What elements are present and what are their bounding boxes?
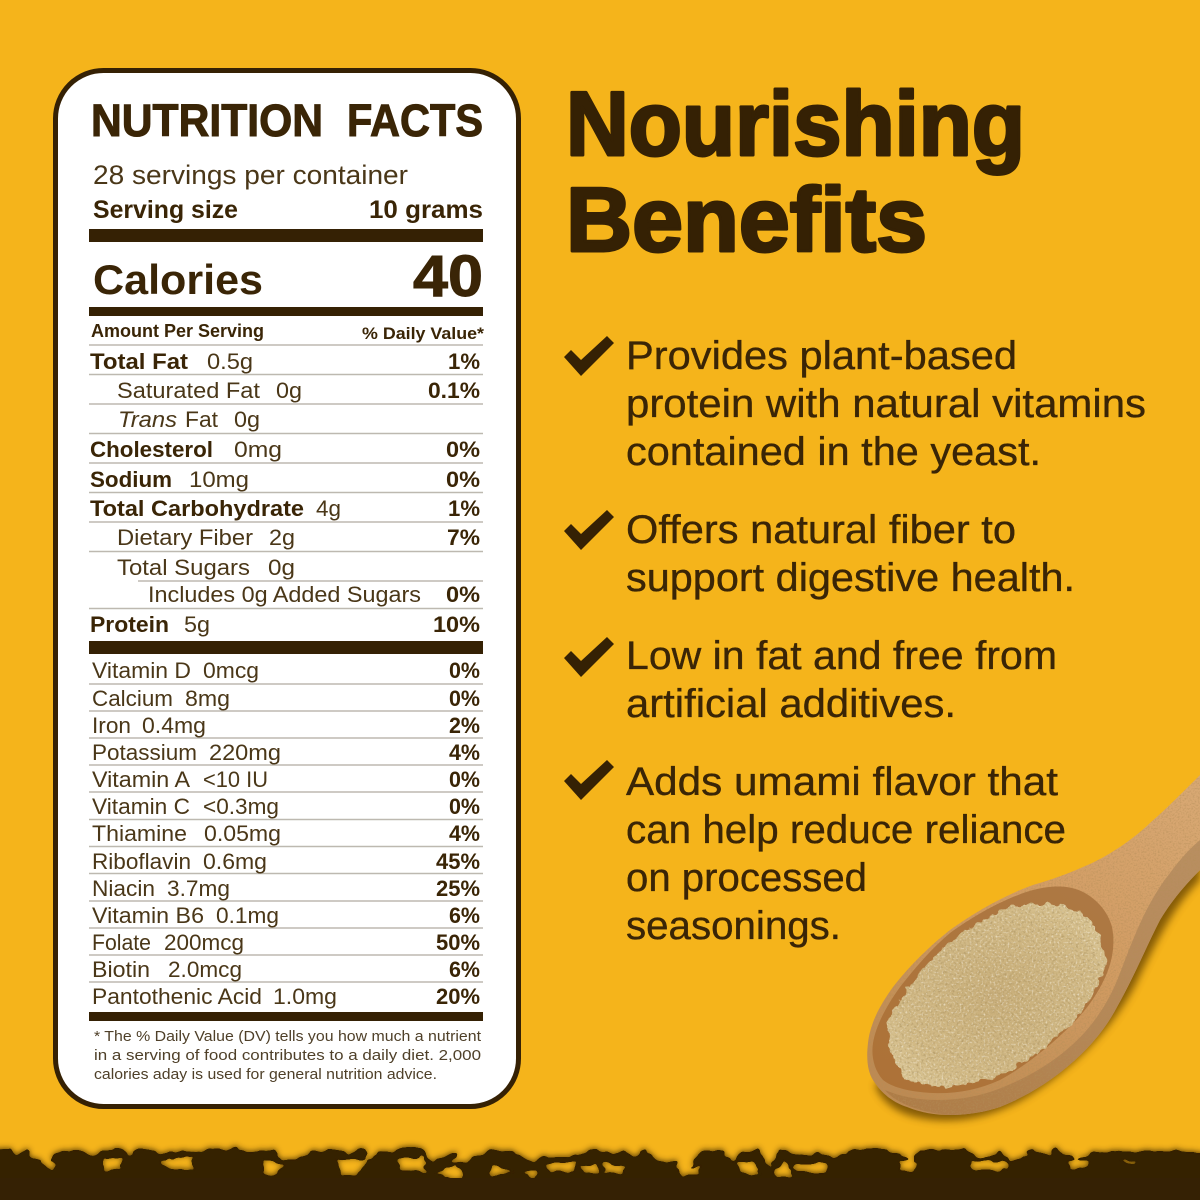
footnote bbox=[94, 1028, 482, 1083]
benefit text: Low in fat and free from bbox=[626, 634, 1057, 678]
row: total sugars: Total Sugars bbox=[117, 555, 250, 580]
row: saturated fat: 0.1% bbox=[428, 378, 480, 403]
row: niacin: 25% bbox=[436, 876, 480, 901]
ground: dark crumbled soil strip bbox=[0, 1147, 1200, 1200]
row: sodium bbox=[90, 467, 480, 492]
benefit: natural fiber bbox=[564, 508, 1075, 600]
row: iron: 2% bbox=[449, 713, 480, 738]
heading: nutrition facts: NUTRITION bbox=[91, 95, 323, 146]
row: saturated fat: 0g bbox=[276, 378, 302, 403]
row: total fat: 0.5g bbox=[207, 349, 253, 374]
heading: nutrition facts bbox=[91, 95, 483, 146]
row: total fat bbox=[90, 349, 480, 374]
footnote: in a serving of food contributes to a daily diet. 2,000 bbox=[94, 1047, 481, 1064]
row: pantothenic acid: Pantothenic Acid bbox=[92, 984, 262, 1009]
column headings: % Daily Value* bbox=[362, 324, 484, 343]
yeast powder bbox=[888, 904, 1105, 1087]
benefit text: Adds umami flavor that bbox=[626, 760, 1058, 804]
benefit: low in fat bbox=[564, 634, 1057, 726]
benefit text: can help reduce reliance bbox=[626, 808, 1066, 852]
row: cholesterol: 0% bbox=[446, 437, 480, 462]
row: riboflavin: 45% bbox=[436, 849, 480, 874]
row: added sugars: 0% bbox=[446, 582, 480, 607]
row: vitamin a: <10 IU bbox=[203, 767, 268, 792]
row: dietary fiber: 2g bbox=[269, 525, 295, 550]
row: total sugars bbox=[117, 555, 295, 580]
row: protein bbox=[90, 612, 480, 637]
row: cholesterol: 0mg bbox=[234, 437, 282, 462]
icon: check mark bbox=[564, 336, 614, 376]
nutrient rows bbox=[90, 349, 480, 637]
title: Benefits bbox=[566, 170, 927, 271]
row: total carbohydrate: 4g bbox=[316, 496, 341, 521]
row: trans fat bbox=[118, 407, 260, 432]
row: folate: 50% bbox=[436, 930, 480, 955]
row: vitamin a: Vitamin A bbox=[92, 767, 190, 792]
row: potassium: Potassium bbox=[92, 740, 197, 765]
row: thiamine: 0.05mg bbox=[204, 821, 281, 846]
row: trans fat: Trans bbox=[118, 407, 177, 432]
row: folate bbox=[92, 930, 480, 955]
row: biotin bbox=[92, 957, 480, 982]
benefit text: Offers natural fiber to bbox=[626, 508, 1016, 552]
row: thiamine: 4% bbox=[449, 821, 480, 846]
footnote: calories aday is used for general nutrition advice. bbox=[94, 1066, 437, 1083]
row: folate: Folate bbox=[92, 930, 151, 955]
spoon underside bbox=[885, 840, 1200, 1115]
row: riboflavin: 0.6mg bbox=[203, 849, 267, 874]
row: pantothenic acid: 20% bbox=[436, 984, 480, 1009]
row: calcium: Calcium bbox=[92, 686, 173, 711]
row: dietary fiber bbox=[117, 525, 480, 550]
row: niacin: 3.7mg bbox=[167, 876, 230, 901]
title: Nourishing bbox=[566, 74, 1025, 175]
vitamin and mineral rows bbox=[92, 658, 480, 1009]
row: vitamin c: Vitamin C bbox=[92, 794, 190, 819]
row: vitamin c bbox=[92, 794, 480, 819]
panel outline bbox=[56, 70, 518, 1106]
benefit text bbox=[626, 760, 1066, 948]
row: iron bbox=[92, 713, 480, 738]
benefit text: on processed bbox=[626, 856, 867, 900]
row: thiamine: Thiamine bbox=[92, 821, 187, 846]
row: sodium: Sodium bbox=[90, 467, 172, 492]
row: vitamin d: 0% bbox=[449, 658, 480, 683]
row: total carbohydrate bbox=[90, 496, 480, 521]
benefit text: protein with natural vitamins bbox=[626, 382, 1146, 426]
spoon body bbox=[867, 775, 1200, 1115]
row: cholesterol: Cholesterol bbox=[90, 437, 213, 462]
row: protein: 5g bbox=[184, 612, 210, 637]
row: protein: 10% bbox=[433, 612, 480, 637]
benefit: umami flavor bbox=[564, 760, 1066, 948]
row: vitamin a: 0% bbox=[449, 767, 480, 792]
row: total fat: Total Fat bbox=[90, 349, 189, 374]
benefit text: Provides plant-based bbox=[626, 334, 1017, 378]
servings per container: 28 servings per container bbox=[93, 160, 408, 190]
serving size: 10 grams bbox=[369, 196, 483, 224]
row: saturated fat: Saturated Fat bbox=[117, 378, 260, 403]
benefit text: seasonings. bbox=[626, 904, 841, 948]
icon: check mark bbox=[564, 510, 614, 550]
row: folate: 200mcg bbox=[164, 930, 244, 955]
row: potassium: 220mg bbox=[209, 740, 281, 765]
row: total sugars: 0g bbox=[268, 555, 295, 580]
row: biotin: 6% bbox=[449, 957, 480, 982]
heading: nutrition facts: FACTS bbox=[347, 95, 483, 146]
calories bbox=[93, 244, 483, 309]
row: vitamin b6: 0.1mg bbox=[216, 903, 279, 928]
row: pantothenic acid: 1.0mg bbox=[273, 984, 337, 1009]
benefit text: contained in the yeast. bbox=[626, 430, 1041, 474]
column headings bbox=[91, 321, 484, 343]
row: vitamin d: 0mcg bbox=[203, 658, 259, 683]
row: vitamin c: <0.3mg bbox=[203, 794, 279, 819]
row: added sugars: Includes 0g Added Sugars bbox=[148, 582, 421, 607]
panel: nutrition facts label bbox=[56, 70, 518, 1106]
row: iron: 0.4mg bbox=[142, 713, 206, 738]
row: riboflavin bbox=[92, 849, 480, 874]
benefit text: support digestive health. bbox=[626, 556, 1075, 600]
row: iron: Iron bbox=[92, 713, 131, 738]
row: calcium bbox=[92, 686, 480, 711]
soil edge bbox=[0, 1147, 1200, 1190]
row: vitamin b6: 6% bbox=[449, 903, 480, 928]
benefit text bbox=[626, 634, 1057, 726]
row: vitamin d: Vitamin D bbox=[92, 658, 191, 683]
benefit text bbox=[626, 334, 1146, 474]
illustration: wooden spoon with yeast powder bbox=[867, 775, 1200, 1121]
row: trans fat: 0g bbox=[234, 407, 260, 432]
row: sodium: 10mg bbox=[189, 467, 249, 492]
row: vitamin d bbox=[92, 658, 480, 683]
row: riboflavin: Riboflavin bbox=[92, 849, 191, 874]
benefit text bbox=[626, 508, 1075, 600]
row: protein: Protein bbox=[90, 612, 169, 637]
row: cholesterol bbox=[90, 437, 480, 462]
row: biotin: Biotin bbox=[92, 957, 150, 982]
row: dietary fiber: 7% bbox=[447, 525, 480, 550]
soil base bbox=[0, 1178, 1200, 1200]
spoon shadow bbox=[875, 850, 1200, 1121]
row: sodium: 0% bbox=[446, 467, 480, 492]
row: total carbohydrate: Total Carbohydrate bbox=[90, 496, 304, 521]
row: vitamin a bbox=[92, 767, 480, 792]
calories: 40 bbox=[413, 244, 483, 309]
spoon bowl bbox=[872, 886, 1113, 1093]
row: calcium: 0% bbox=[449, 686, 480, 711]
row: saturated fat bbox=[117, 378, 480, 403]
row: potassium bbox=[92, 740, 480, 765]
row: biotin: 2.0mcg bbox=[168, 957, 242, 982]
footnote: * The % Daily Value (DV) tells you how much a nutrient bbox=[94, 1028, 482, 1045]
row: dietary fiber: Dietary Fiber bbox=[117, 525, 253, 550]
benefit: plant-based protein bbox=[564, 334, 1146, 474]
row: vitamin b6: Vitamin B6 bbox=[92, 903, 204, 928]
row: vitamin c: 0% bbox=[449, 794, 480, 819]
row: niacin: Niacin bbox=[92, 876, 155, 901]
icon: check mark bbox=[564, 760, 614, 800]
icon: check mark bbox=[564, 637, 614, 677]
row: total fat: 1% bbox=[448, 349, 480, 374]
column headings: Amount Per Serving bbox=[91, 321, 264, 341]
benefit text: artificial additives. bbox=[626, 682, 956, 726]
row: pantothenic acid bbox=[92, 984, 480, 1009]
row: niacin bbox=[92, 876, 480, 901]
row: total carbohydrate: 1% bbox=[448, 496, 480, 521]
row: thiamine bbox=[92, 821, 480, 846]
row: calcium: 8mg bbox=[185, 686, 230, 711]
serving size: Serving size bbox=[93, 196, 238, 224]
serving size bbox=[93, 196, 483, 224]
row: potassium: 4% bbox=[449, 740, 480, 765]
title bbox=[566, 74, 1025, 271]
calories: Calories bbox=[93, 256, 263, 303]
row: trans fat: Fat bbox=[185, 407, 218, 432]
row: vitamin b6 bbox=[92, 903, 480, 928]
